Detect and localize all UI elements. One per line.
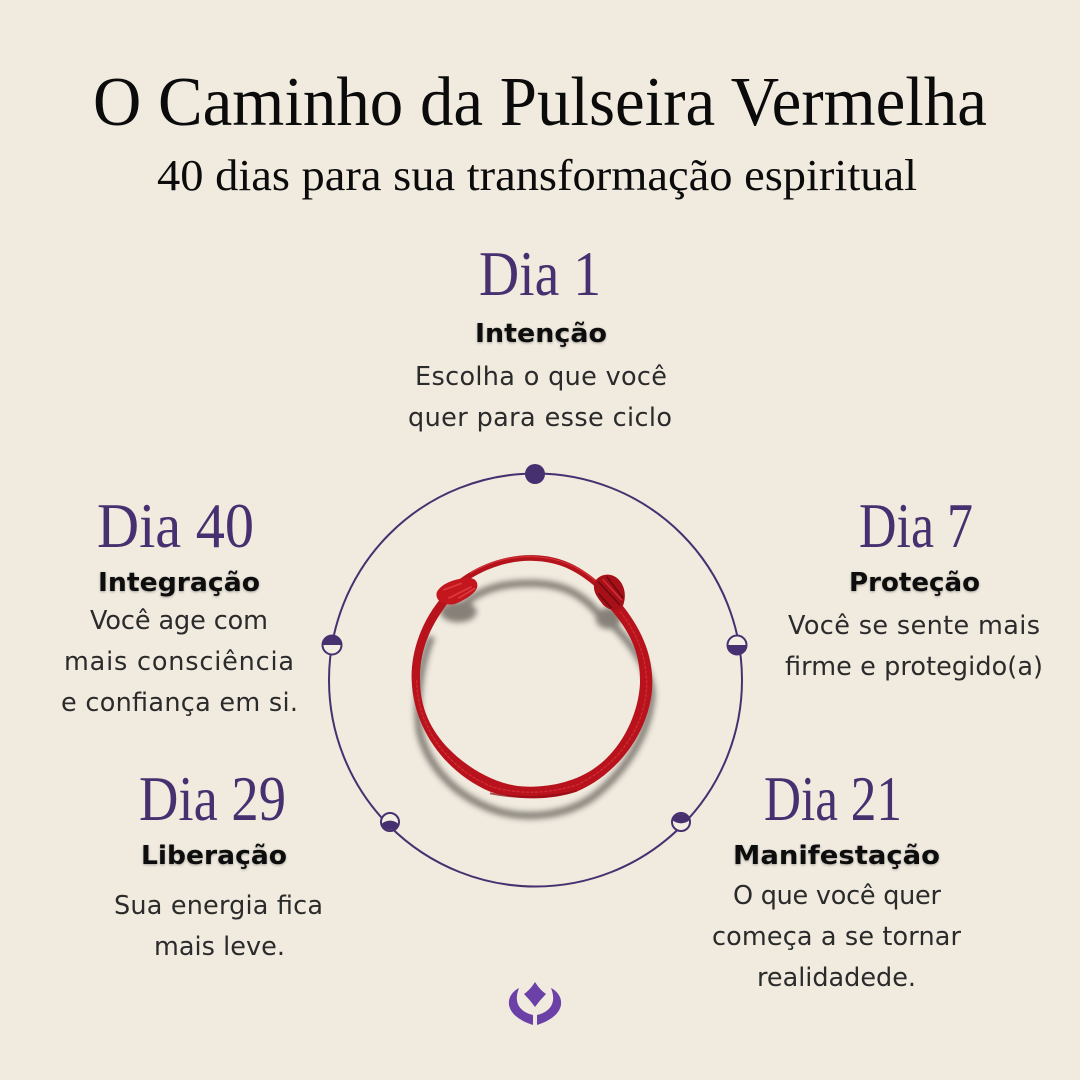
panel: dia 1: Escolha o que você (415, 362, 667, 392)
panel: dia 40: e confiança em si. (61, 688, 298, 718)
panel: dia 21: Dia 21 (764, 764, 902, 834)
panel: dia 7 (785, 491, 1043, 682)
icon: half moon dia 40 (322, 636, 342, 654)
panel: dia 21: começa a se tornar (712, 922, 962, 952)
panel: dia 21: O que você quer (733, 881, 942, 911)
panel: dia 29: Dia 29 (139, 764, 286, 834)
panel: dia 21: realidadede. (757, 963, 916, 993)
panel: dia 1: Dia 1 (479, 239, 601, 309)
panel: dia 1: quer para esse ciclo (408, 403, 672, 433)
panel: dia 21 (712, 764, 962, 993)
panel: dia 40: Você age com (90, 606, 268, 636)
panel: dia 7: firme e protegido(a) (785, 652, 1043, 682)
panel: dia 7: Você se sente mais (788, 611, 1040, 641)
title: O Caminho da Pulseira Vermelha (93, 64, 987, 141)
panel: dia 40 (61, 491, 298, 718)
icon: half moon dia 7 (728, 636, 746, 654)
red bracelet (412, 557, 652, 815)
icon: lotus logo (509, 982, 561, 1025)
subtitle: 40 dias para sua transformação espiritual (157, 151, 917, 200)
panel: dia 29: Sua energia fica (114, 891, 323, 921)
panel: dia 7: Proteção (849, 568, 980, 598)
icon: crescent dia 29 (381, 813, 399, 831)
panel: dia 29 (114, 764, 323, 962)
panel: dia 40: Integração (98, 568, 260, 598)
panel: dia 40: Dia 40 (97, 491, 254, 561)
panel: dia 7: Dia 7 (859, 491, 973, 561)
icon: crescent dia 21 (672, 813, 690, 831)
panel: dia 1 (408, 239, 672, 433)
cycle ring (329, 474, 742, 886)
icon: new moon dia 1 (525, 464, 545, 484)
panel: dia 1: Intenção (475, 319, 607, 349)
panel: dia 21: Manifestação (733, 841, 940, 871)
panel: dia 29: mais leve. (154, 932, 285, 962)
panel: dia 40: mais consciência (64, 647, 294, 677)
panel: dia 29: Liberação (141, 841, 287, 871)
